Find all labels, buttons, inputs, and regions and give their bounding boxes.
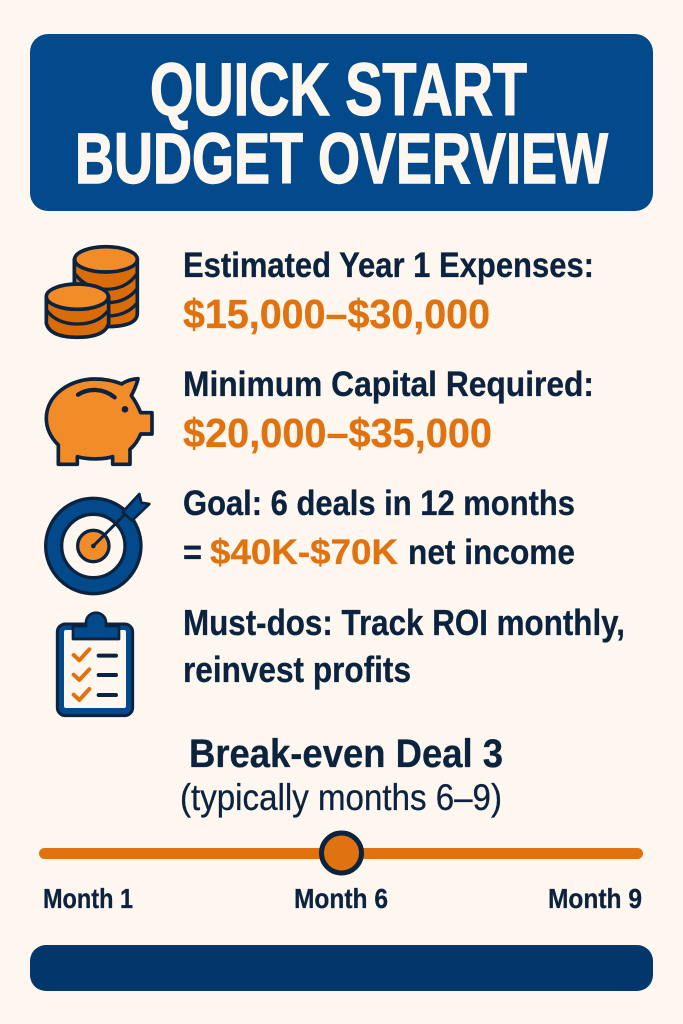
title banner (30, 34, 653, 211)
footer bar (30, 945, 653, 991)
goal text: $40K-$70K (210, 533, 398, 572)
icon: coin stacks (46, 247, 137, 337)
title (75, 48, 608, 199)
estimated expenses text: Estimated Year 1 Expenses: (183, 246, 594, 285)
month labels: Month 1 (43, 883, 133, 914)
minimum capital text (183, 365, 594, 456)
must-dos text: reinvest profits (183, 649, 411, 690)
goal text: Goal: 6 deals in 12 months (183, 484, 575, 523)
month labels: Month 6 (294, 883, 388, 914)
break-even heading: Break-even Deal 3 (189, 732, 503, 776)
break-even heading (180, 732, 503, 818)
icon: target with arrow (46, 494, 149, 594)
goal text (183, 484, 575, 572)
timeline marker (322, 833, 362, 873)
goal text: = (183, 533, 202, 572)
estimated expenses text (183, 246, 594, 337)
minimum capital text: $20,000–$35,000 (183, 410, 492, 456)
month labels (43, 883, 642, 914)
must-dos text (183, 602, 625, 690)
title: QUICK START (150, 48, 527, 131)
break-even heading: (typically months 6–9) (180, 777, 502, 818)
minimum capital text: Minimum Capital Required: (183, 365, 594, 404)
goal text: net income (408, 533, 575, 572)
icon: piggy bank (46, 379, 152, 464)
timeline (39, 833, 643, 914)
icon: clipboard checklist (57, 613, 133, 716)
estimated expenses text: $15,000–$30,000 (183, 291, 490, 337)
must-dos text: Must-dos: Track ROI monthly, (183, 602, 625, 643)
month labels: Month 9 (548, 883, 642, 914)
